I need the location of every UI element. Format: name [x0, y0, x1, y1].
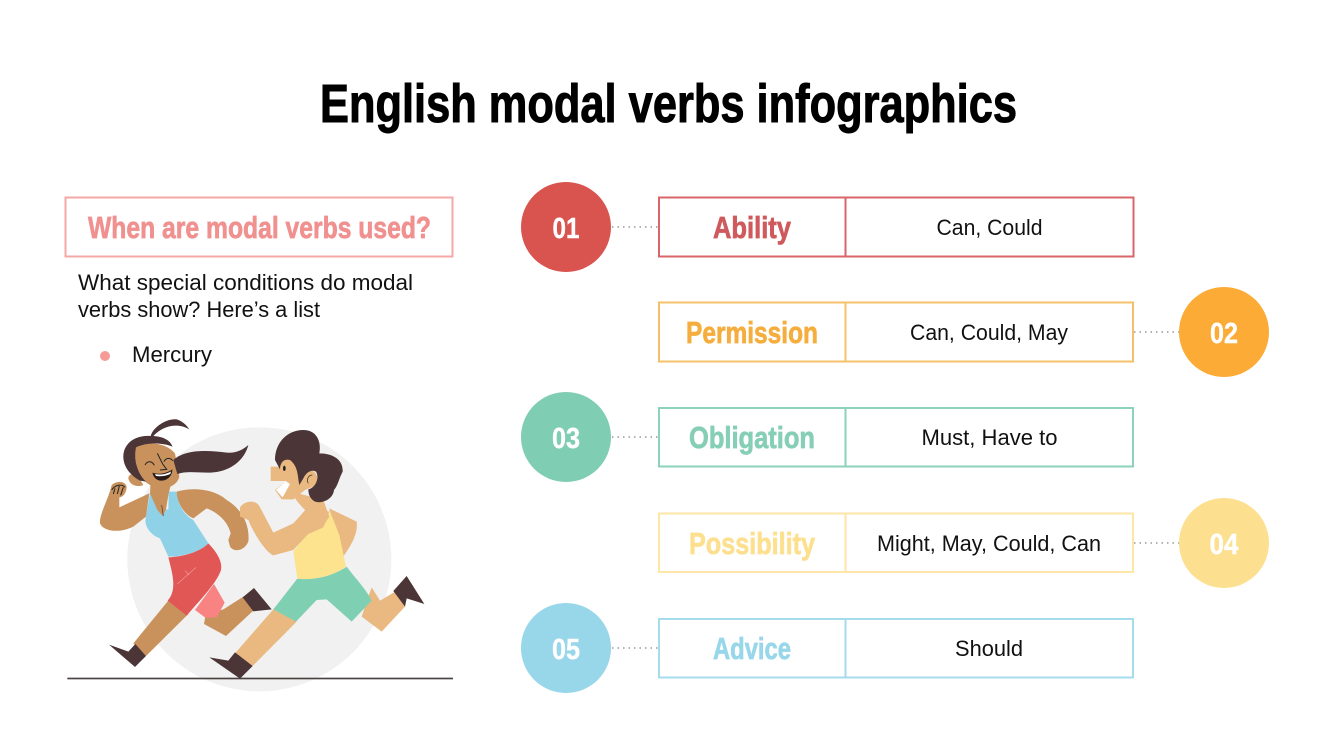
row 03: obligation — [521, 392, 1133, 482]
collar line — [162, 505, 163, 516]
row box — [659, 197, 1134, 257]
bullet list: Mercury — [132, 342, 212, 367]
connector — [1134, 542, 1179, 544]
runner: right woman — [209, 430, 424, 679]
back arm — [329, 508, 357, 557]
row box — [659, 618, 1133, 678]
back leg — [204, 597, 254, 636]
number badge: 05 — [552, 634, 580, 666]
row 02: permission — [659, 287, 1269, 377]
row 04: possibility — [659, 498, 1269, 588]
top — [293, 512, 346, 579]
number badge — [521, 182, 611, 272]
mouth — [276, 481, 290, 497]
hair — [275, 430, 343, 502]
row box: Advice — [713, 631, 791, 666]
number badge — [1179, 498, 1269, 588]
number badge: 01 — [552, 213, 580, 245]
front arm — [240, 502, 329, 555]
description text: verbs show? Here’s a list — [78, 297, 320, 322]
row box: Can, Could — [936, 215, 1042, 240]
far arm raised — [100, 482, 149, 531]
number badge: 02 — [1210, 318, 1238, 350]
shorts — [168, 543, 221, 616]
neck and head — [295, 493, 329, 528]
number badge — [521, 603, 611, 693]
ground line — [67, 678, 453, 679]
description text: What special conditions do modal — [78, 270, 413, 295]
description text — [78, 270, 413, 322]
runner: left woman — [100, 419, 272, 667]
connector — [612, 436, 658, 438]
number badge: 03 — [552, 423, 580, 455]
eye — [283, 466, 286, 471]
row box: Obligation — [689, 420, 815, 455]
front leg — [235, 609, 297, 666]
neck and head — [150, 482, 172, 516]
row box: Must, Have to — [922, 425, 1058, 450]
shorts — [273, 567, 372, 622]
row box: Permission — [686, 315, 818, 350]
row 01: ability — [521, 182, 1134, 272]
row box: Should — [955, 636, 1023, 661]
connector — [1134, 331, 1179, 333]
near arm — [177, 489, 249, 550]
top — [145, 492, 208, 557]
row box: Ability — [713, 210, 792, 245]
background circle — [127, 427, 391, 691]
illustration: two women running — [67, 419, 453, 691]
connector — [612, 226, 658, 228]
row 05: advice — [521, 603, 1133, 693]
row box: Can, Could, May — [910, 320, 1068, 345]
number badge — [1179, 287, 1269, 377]
number badge — [521, 392, 611, 482]
number badge: 04 — [1210, 529, 1238, 561]
row box — [659, 407, 1133, 467]
hair — [123, 419, 189, 482]
row box: Might, May, Could, Can — [877, 531, 1101, 556]
row box: Possibility — [689, 526, 816, 561]
title: English modal verbs infographics — [320, 74, 1017, 134]
connector — [612, 647, 658, 649]
heading box — [66, 198, 452, 256]
heading box: When are modal verbs used? — [88, 210, 431, 245]
row box — [659, 302, 1133, 362]
row box — [659, 513, 1133, 573]
panel: when are modal verbs used — [66, 198, 452, 367]
back leg — [362, 587, 405, 632]
face — [145, 453, 173, 470]
front leg — [133, 601, 188, 656]
